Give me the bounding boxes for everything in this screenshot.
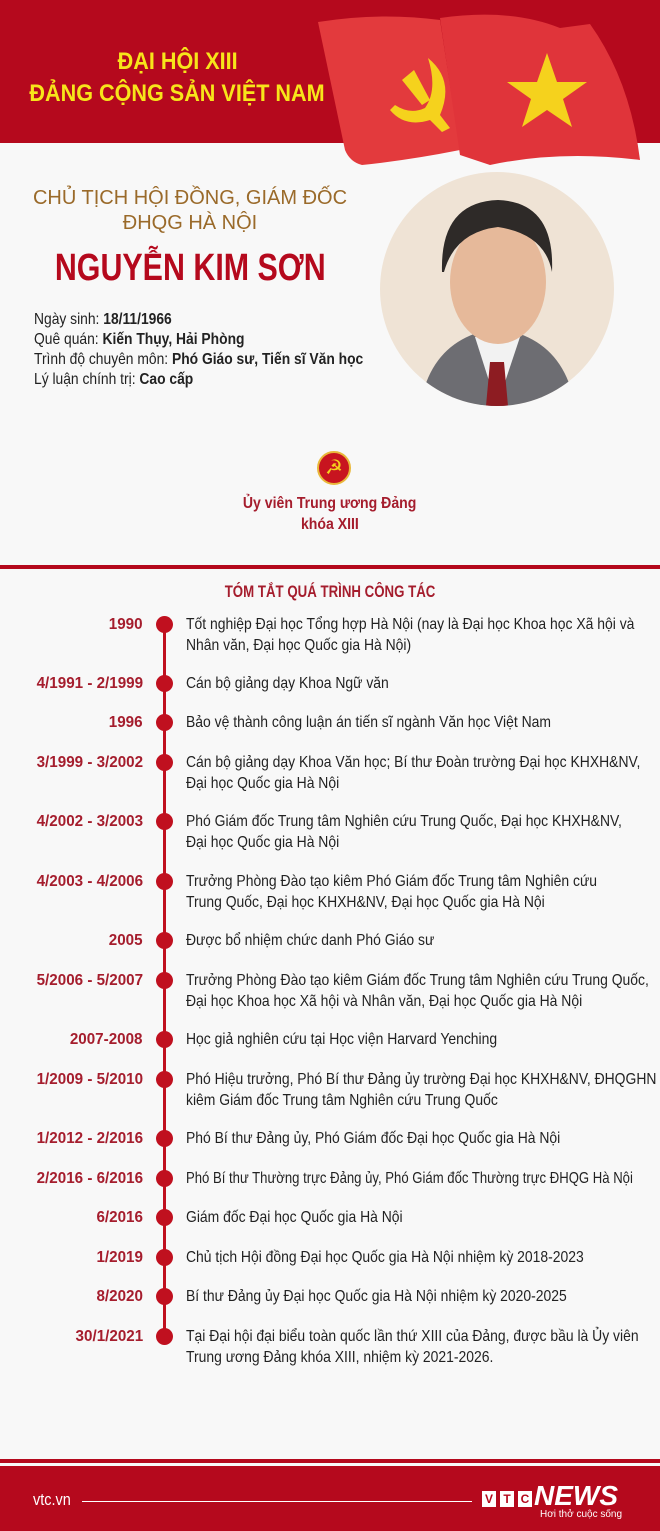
timeline row: Phó Bí thư Đảng ủy, Phó Giám đốc Đại học Quốc gia Hà Nội — [186, 1130, 560, 1147]
timeline row: 1/2012 - 2/2016 — [37, 1130, 143, 1147]
timeline row: Học giả nghiên cứu tại Học viện Harvard Yenching — [186, 1031, 497, 1048]
timeline row: Cán bộ giảng dạy Khoa Văn học; Bí thư Đoàn trường Đại học KHXH&NV, — [186, 754, 640, 771]
timeline row: Trưởng Phòng Đào tạo kiêm Phó Giám đốc Trung tâm Nghiên cứu — [186, 873, 597, 890]
logo: VTC News: T — [503, 1492, 511, 1506]
timeline row: Phó Giám đốc Trung tâm Nghiên cứu Trung Quốc, Đại học KHXH&NV, — [186, 813, 622, 830]
icon: party emblem: ☭ — [325, 457, 343, 479]
timeline row: Phó Bí thư Thường trực Đảng ủy, Phó Giám đốc Thường trực ĐHQG Hà Nội — [186, 1170, 633, 1187]
membership: Ủy viên Trung ương Đảng — [243, 495, 417, 512]
logo: VTC News — [482, 1480, 622, 1520]
timeline row — [75, 1326, 639, 1366]
timeline row — [36, 873, 597, 911]
timeline row: Giám đốc Đại học Quốc gia Hà Nội — [186, 1209, 403, 1226]
timeline row: 4/1991 - 2/1999 — [37, 675, 143, 692]
timeline row — [36, 675, 389, 692]
timeline row: 1/2019 — [97, 1249, 143, 1266]
timeline row: 2/2016 - 6/2016 — [37, 1170, 143, 1187]
text: Trung Quốc, Đại học KHXH&NV, Đại học Quốc gia Hà Nội — [186, 894, 545, 911]
subtitle: position: ĐHQG HÀ NỘI — [123, 212, 257, 234]
title: ĐẢNG CỘNG SẢN VIỆT NAM — [30, 80, 325, 107]
icon: party emblem — [317, 451, 351, 485]
title — [29, 47, 325, 107]
timeline row: Chủ tịch Hội đồng Đại học Quốc gia Hà Nội nhiệm kỳ 2018-2023 — [186, 1249, 584, 1266]
footer url: vtc.vn — [33, 1490, 71, 1509]
footer — [0, 1459, 660, 1531]
timeline row: 5/2006 - 5/2007 — [37, 972, 143, 989]
text: Trung ương Đảng khóa XIII, nhiệm kỳ 2021-2026. — [186, 1349, 493, 1366]
name: NGUYỄN KIM SƠN — [55, 247, 325, 289]
timeline row: 1/2009 - 5/2010 — [37, 1071, 143, 1088]
timeline row: Phó Hiệu trưởng, Phó Bí thư Đảng ủy trường Đại học KHXH&NV, ĐHQGHN — [186, 1071, 656, 1088]
subtitle: position — [33, 186, 347, 234]
timeline row: Được bổ nhiệm chức danh Phó Giáo sư — [186, 932, 434, 949]
timeline row 1990: 1990 — [109, 616, 143, 633]
divider red — [0, 565, 660, 569]
header banner — [0, 0, 660, 143]
personal info: Lý luận chính trị: Cao cấp — [34, 371, 193, 388]
timeline row: Cán bộ giảng dạy Khoa Ngữ văn — [186, 675, 389, 692]
timeline row: 2007-2008 — [70, 1031, 143, 1048]
timeline row: 2005 — [109, 932, 143, 949]
membership: khóa XIII — [301, 516, 359, 533]
timeline row — [37, 972, 649, 1010]
icon: flags — [318, 14, 640, 165]
text: Đại học Quốc gia Hà Nội — [186, 834, 339, 851]
timeline row: 1996 — [109, 714, 143, 731]
timeline row: 6/2016 — [97, 1209, 143, 1226]
text: kiêm Giám đốc Trung tâm Nghiên cứu Trung Quốc — [186, 1092, 498, 1109]
timeline — [163, 632, 166, 1328]
membership — [243, 494, 417, 533]
timeline row: Tại Đại hội đại biểu toàn quốc lần thứ XIII của Đảng, được bầu là Ủy viên — [186, 1328, 639, 1345]
timeline heading: TÓM TẮT QUÁ TRÌNH CÔNG TÁC — [225, 582, 435, 601]
timeline row: Trưởng Phòng Đào tạo kiêm Giám đốc Trung tâm Nghiên cứu Trung Quốc, — [186, 972, 649, 989]
timeline row — [37, 1071, 656, 1109]
timeline row — [37, 754, 640, 792]
logo: VTC News: Hơi thở cuộc sống — [540, 1509, 622, 1520]
subtitle: position: CHỦ TỊCH HỘI ĐỒNG, GIÁM ĐỐC — [33, 187, 347, 209]
text: Đại học Quốc gia Hà Nội — [186, 775, 339, 792]
logo: VTC News: C — [521, 1492, 529, 1506]
timeline row — [36, 813, 622, 851]
logo: VTC News: V — [485, 1492, 493, 1506]
logo: VTC News: NEWS — [534, 1480, 618, 1511]
timeline row: 4/2002 - 3/2003 — [37, 813, 143, 830]
timeline row: Bảo vệ thành công luận án tiến sĩ ngành Văn học Việt Nam — [186, 714, 551, 731]
personal info: Quê quán: Kiến Thụy, Hải Phòng — [34, 331, 244, 348]
timeline row: 3/1999 - 3/2002 — [37, 754, 143, 771]
timeline row: Bí thư Đảng ủy Đại học Quốc gia Hà Nội nhiệm kỳ 2020-2025 — [186, 1288, 567, 1305]
personal info: Trình độ chuyên môn: Phó Giáo sư, Tiến sĩ Văn học — [34, 351, 363, 368]
title: ĐẠI HỘI XIII — [117, 48, 238, 75]
personal info: Ngày sinh: 18/11/1966 — [34, 311, 172, 328]
text: Nhân văn, Đại học Quốc gia Hà Nội) — [186, 637, 411, 654]
timeline row: 8/2020 — [97, 1288, 143, 1305]
timeline row: 4/2003 - 4/2006 — [37, 873, 143, 890]
portrait — [380, 172, 614, 406]
timeline row 1990: Tốt nghiệp Đại học Tổng hợp Hà Nội (nay là Đại học Khoa học Xã hội và — [186, 616, 634, 633]
timeline row: 30/1/2021 — [75, 1328, 143, 1345]
timeline row 1990 — [109, 616, 634, 654]
personal info — [34, 311, 363, 388]
text: Đại học Khoa học Xã hội và Nhân văn, Đại học Quốc gia Hà Nội — [186, 993, 582, 1010]
